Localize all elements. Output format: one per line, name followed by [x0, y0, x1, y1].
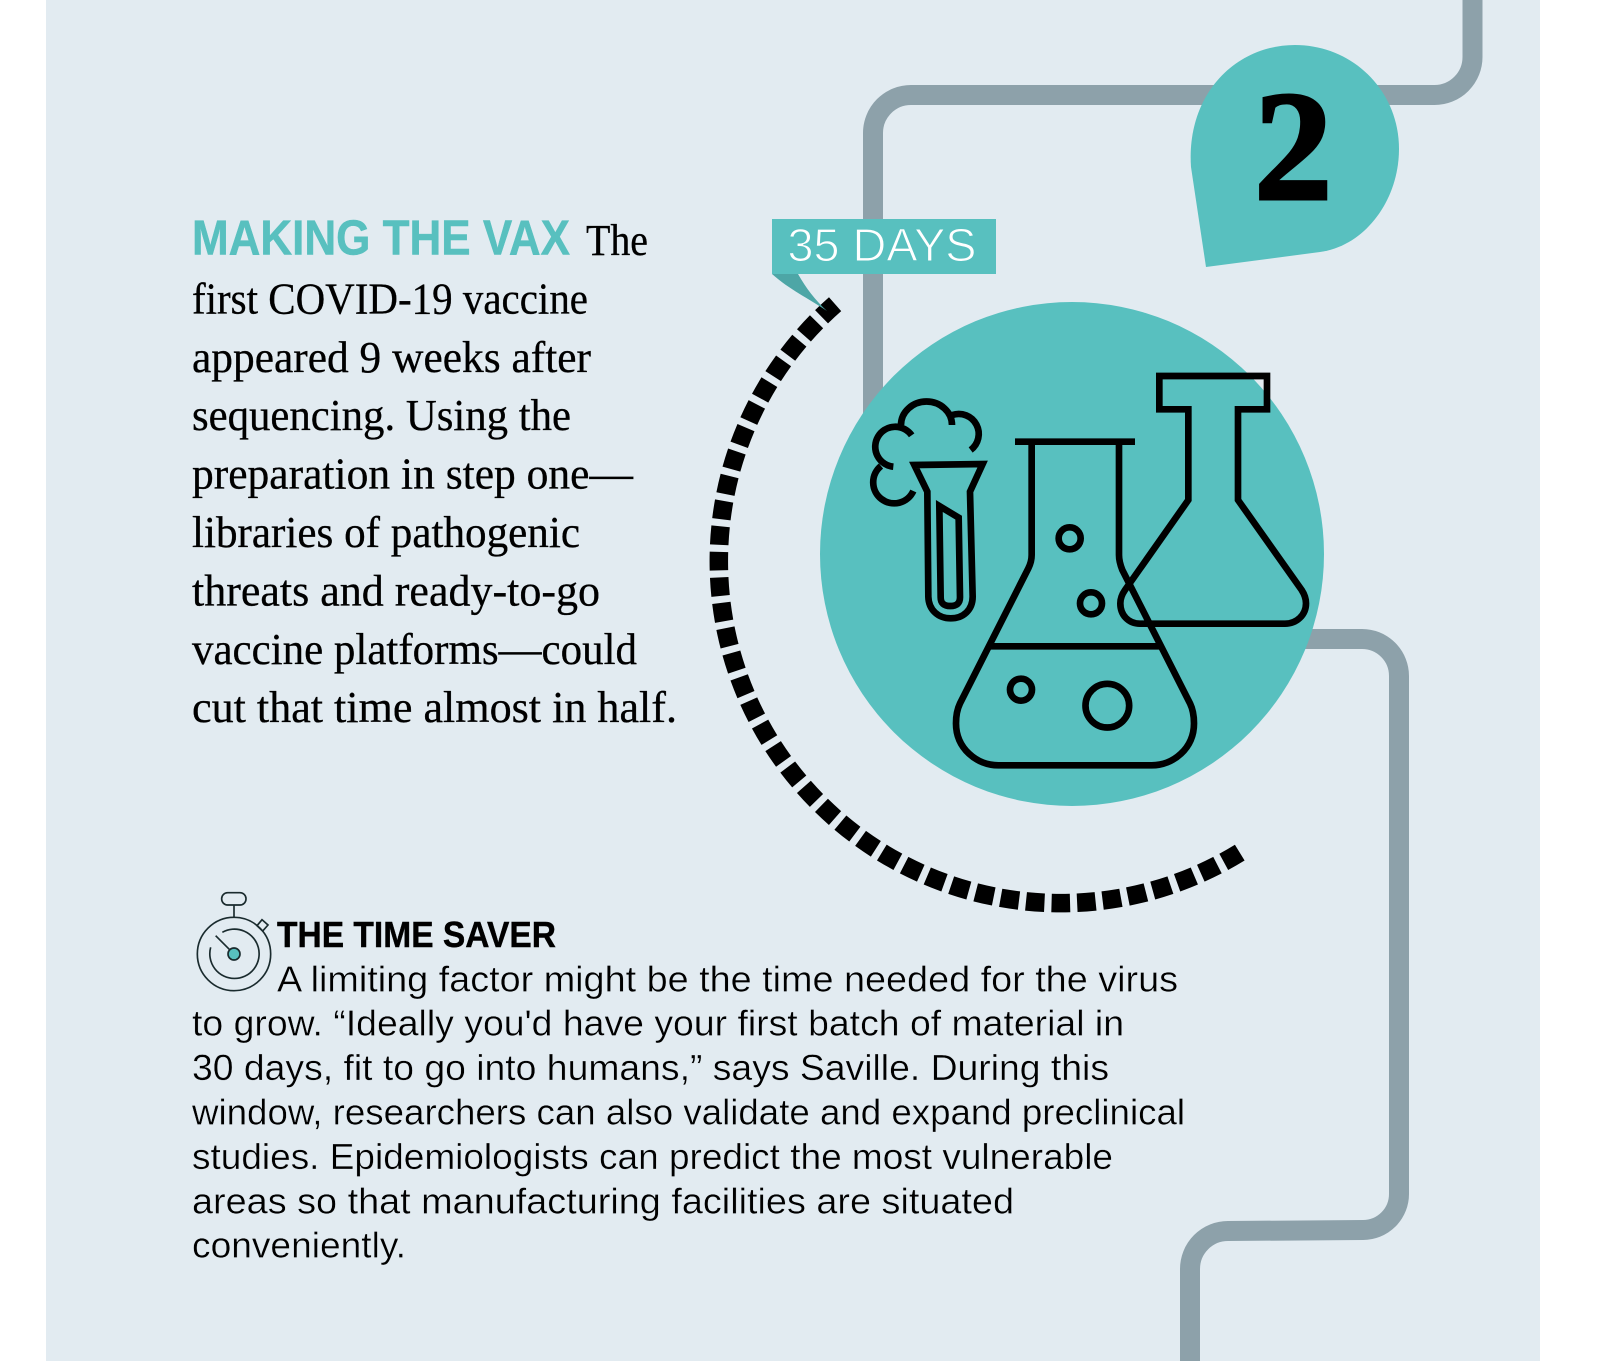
- paragraph: threats and ready-to-go: [192, 566, 600, 615]
- paragraph: studies. Epidemiologists can predict the most vulnerable: [192, 1136, 1113, 1177]
- paragraph: preparation in step one—: [192, 450, 634, 499]
- 35 days label: [772, 219, 996, 311]
- icon: flasks and test tube: [873, 376, 1306, 765]
- paragraph: cut that time almost in half.: [192, 683, 677, 732]
- label text: 35 DAYS: [788, 219, 976, 271]
- paragraph: appeared 9 weeks after: [192, 333, 591, 382]
- icon: test tube: [914, 464, 983, 618]
- step number: 2: [1254, 59, 1332, 233]
- step number pin: [1191, 45, 1399, 267]
- paragraph: window, researchers can also validate and expand preclinical: [191, 1092, 1185, 1132]
- paragraph: [192, 216, 677, 732]
- label box: [772, 219, 996, 274]
- icon: back flask: [1120, 376, 1306, 624]
- paragraph: first COVID-19 vaccine: [192, 274, 588, 323]
- paragraph: conveniently.: [192, 1225, 406, 1266]
- dashed timeline arc: [719, 304, 1240, 903]
- paragraph: 30 days, fit to go into humans,” says Saville. During this: [192, 1047, 1109, 1088]
- connector pipe: top: [873, 0, 1472, 440]
- paragraph: A limiting factor might be the time needed for the virus: [277, 958, 1178, 999]
- heading: THE TIME SAVER: [277, 914, 556, 955]
- text block: the time saver: [191, 914, 1185, 1266]
- paragraph: [191, 958, 1185, 1266]
- icon: test tube liquid: [939, 506, 960, 606]
- label pointer: [772, 274, 827, 311]
- paragraph: libraries of pathogenic: [192, 508, 580, 557]
- paragraph: vaccine platforms—could: [192, 625, 637, 674]
- paragraph: areas so that manufacturing facilities are situated: [192, 1180, 1014, 1221]
- paragraph: The: [586, 216, 648, 265]
- large teal circle: [820, 302, 1324, 806]
- icon: front flask: [956, 442, 1194, 765]
- icon: front flask rim: [1015, 432, 1135, 452]
- heading: MAKING THE VAX: [192, 212, 570, 266]
- text block: making the vax: [192, 212, 677, 732]
- paragraph: sequencing. Using the: [192, 391, 571, 440]
- icon: liquid level: [990, 636, 1159, 656]
- paragraph: to grow. “Ideally you'd have your first batch of material in: [192, 1003, 1124, 1044]
- icon: stopwatch: [197, 893, 271, 991]
- connector pipe: bottom: [1190, 639, 1399, 1361]
- icon: vapour cloud: [873, 402, 979, 503]
- icon: bubbles: [1010, 527, 1129, 727]
